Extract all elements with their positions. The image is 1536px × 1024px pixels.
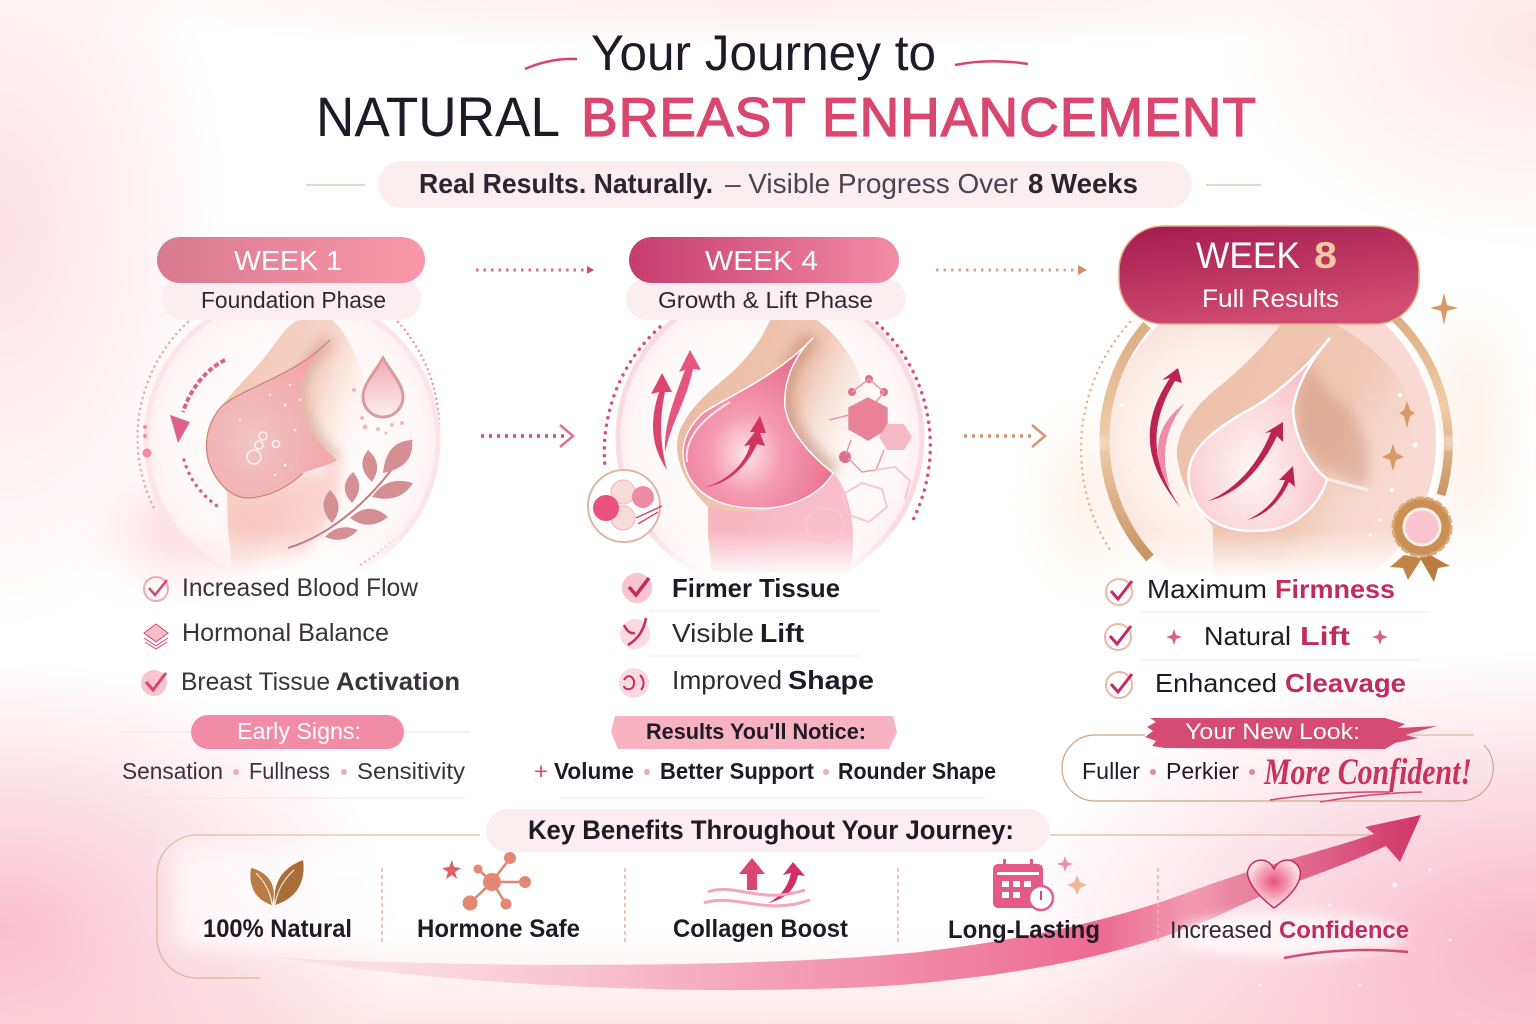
week 8 checklist	[1105, 574, 1430, 698]
week 4 results you'll notice: Results You'll Notice:	[646, 719, 866, 744]
benefit: collagen boost: Collagen Boost	[673, 915, 849, 943]
week 4 results you'll notice: Volume	[554, 758, 634, 784]
leaf sprig	[288, 440, 413, 548]
gold ring arcs	[1104, 318, 1448, 558]
subtitle banner: – Visible Progress Over	[725, 168, 1018, 199]
subtitle banner	[306, 161, 1261, 208]
downward arrow	[142, 360, 225, 508]
panel: week 1	[120, 237, 470, 798]
panel: key benefits	[157, 809, 1452, 990]
title: BREAST ENHANCEMENT	[581, 86, 1256, 148]
week 1 early signs: Early Signs:	[237, 718, 361, 744]
benefit: hormone safe	[417, 852, 580, 943]
week 4 results you'll notice: +	[534, 758, 548, 784]
week 1 early signs: Sensitivity	[357, 758, 466, 784]
week 1 checklist: Increased Blood Flow	[182, 574, 419, 602]
week 1 early signs: Sensation	[122, 758, 223, 784]
week 1 badge	[157, 237, 425, 320]
benefit: long-lasting	[948, 856, 1100, 944]
week 8 new look	[1062, 718, 1493, 802]
benefit: increased confidence: Increased	[1170, 917, 1272, 944]
panel: week 4	[534, 237, 996, 798]
week 8 checklist: Natural	[1204, 621, 1291, 651]
title	[316, 25, 1256, 148]
water drop icon	[352, 358, 404, 434]
sparkles	[1382, 293, 1458, 471]
week 8 new look: Your New Look:	[1185, 719, 1360, 744]
title: NATURAL	[316, 85, 560, 148]
key benefits heading	[486, 809, 1050, 852]
week 8 badge: WEEK	[1196, 235, 1300, 276]
lift arrows	[1150, 368, 1295, 520]
sparkle dust	[1120, 393, 1418, 536]
week 8 checklist: Firmness	[1275, 574, 1395, 604]
title: Your Journey to	[591, 25, 936, 81]
sparkle dust	[1258, 868, 1452, 986]
panel: week 8	[1050, 226, 1500, 802]
week 8 new look: Perkier	[1166, 758, 1239, 784]
illustration: week 4 growth and lift	[587, 320, 932, 572]
week 4 results you'll notice	[534, 716, 996, 798]
subtitle banner: 8 Weeks	[1028, 168, 1138, 199]
week 4 badge: WEEK 4	[705, 245, 818, 276]
week 8 checklist: Enhanced	[1155, 668, 1277, 698]
benefit: increased confidence: Confidence	[1279, 917, 1409, 944]
rising ribbon arrow	[280, 815, 1421, 990]
week 4 checklist: Lift	[760, 618, 804, 648]
benefit: 100% natural	[203, 860, 352, 943]
lift arrows	[651, 350, 766, 487]
week 4 checklist: Shape	[788, 665, 874, 695]
week 1 early signs: Fullness	[249, 758, 330, 784]
week 4 results you'll notice: Rounder Shape	[838, 758, 996, 784]
arrows: week 4 to week 8	[936, 265, 1087, 447]
week 8 new look: More Confident!	[1263, 752, 1472, 793]
week 1 badge: WEEK 1	[234, 245, 342, 276]
award rosette	[1390, 498, 1451, 582]
week 1 badge: Foundation Phase	[201, 287, 386, 313]
week 4 checklist	[619, 573, 880, 698]
benefit: collagen boost	[673, 858, 849, 943]
week 1 checklist	[141, 574, 460, 696]
benefit: hormone safe: Hormone Safe	[417, 915, 580, 943]
week 1 early signs	[120, 715, 470, 798]
week 4 badge: Growth & Lift Phase	[658, 287, 873, 313]
benefit: 100% natural: 100% Natural	[203, 915, 352, 943]
cell cluster icon	[588, 470, 662, 542]
week 4 results you'll notice: Better Support	[660, 758, 814, 784]
subtitle banner: Real Results. Naturally.	[419, 168, 713, 199]
week 4 checklist: Visible	[672, 618, 754, 648]
week 4 badge	[626, 237, 906, 320]
week 1 checklist: Breast Tissue	[181, 668, 330, 696]
illustration: week 8 full results	[1050, 277, 1500, 609]
week 8 new look: Fuller	[1082, 758, 1140, 784]
week 4 checklist: Improved	[672, 665, 782, 695]
week 8 checklist: Maximum	[1147, 574, 1267, 604]
week 1 checklist: Activation	[336, 668, 460, 696]
benefit: increased confidence	[1170, 860, 1409, 958]
week 8 checklist: Cleavage	[1285, 668, 1406, 698]
week 8 badge	[1119, 226, 1419, 324]
week 8 badge: 8	[1314, 235, 1337, 276]
illustration: week 1 foundation	[120, 294, 439, 586]
week 8 badge: Full Results	[1202, 285, 1339, 313]
key benefits heading: Key Benefits Throughout Your Journey:	[528, 815, 1014, 845]
week 4 checklist: Firmer Tissue	[672, 573, 840, 603]
week 8 checklist: Lift	[1300, 621, 1350, 651]
arrows: week 1 to week 4	[476, 266, 594, 447]
molecule icon	[805, 375, 912, 543]
benefit: long-lasting: Long-Lasting	[948, 916, 1100, 944]
week 1 checklist: Hormonal Balance	[182, 619, 389, 647]
